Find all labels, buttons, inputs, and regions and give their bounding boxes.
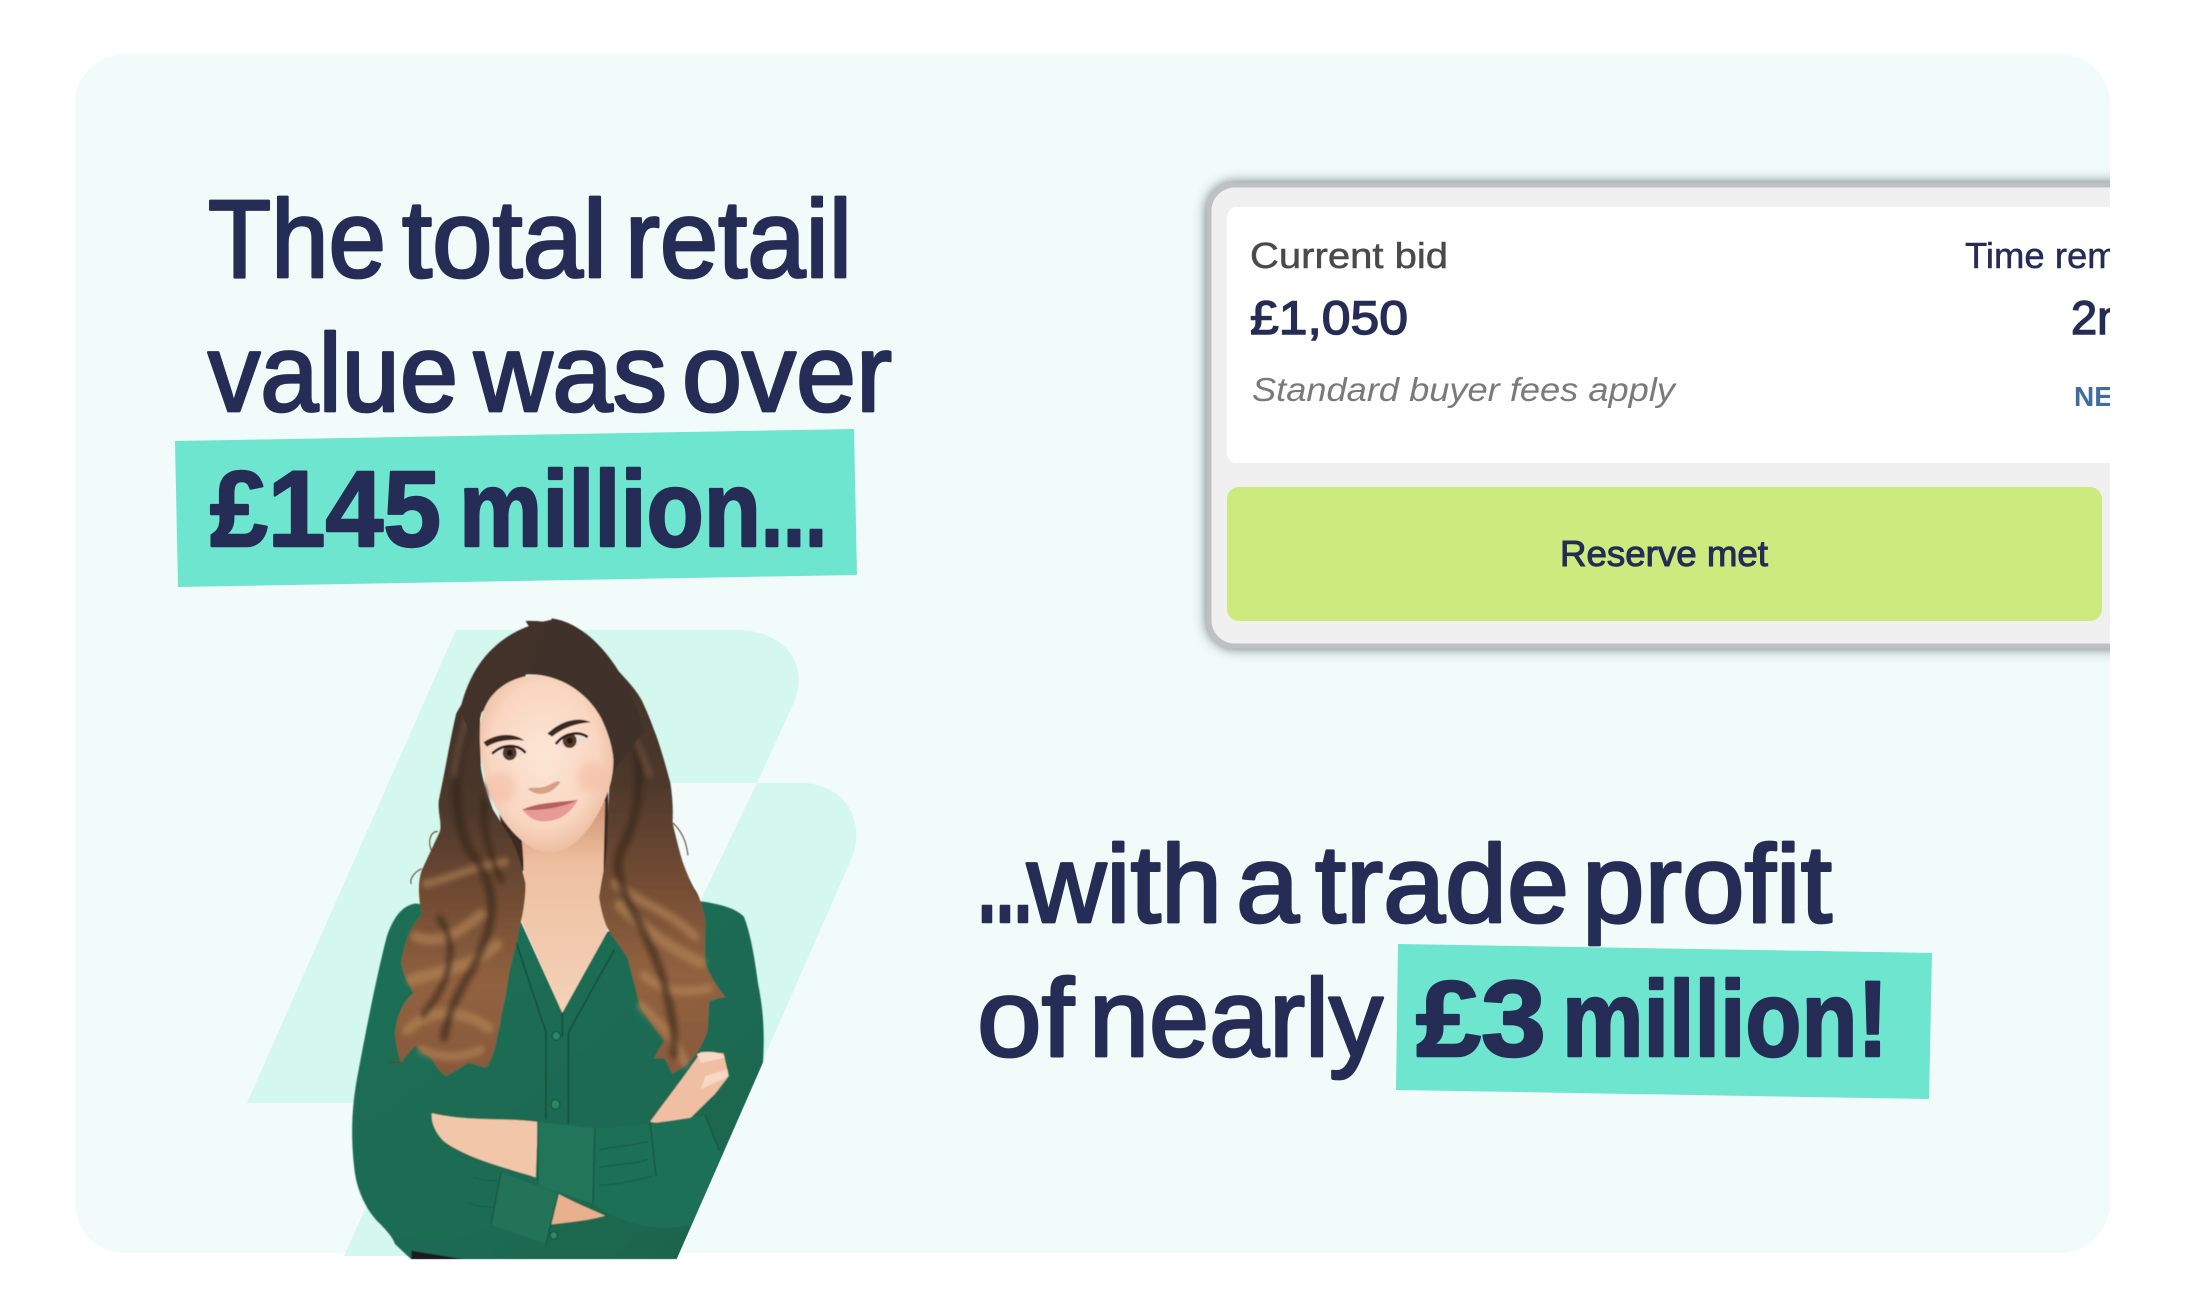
highlighted figure: £3 xyxy=(1416,958,1546,1079)
blouse xyxy=(352,901,764,1259)
hair: right side xyxy=(526,621,726,1074)
button label: Reserve met xyxy=(1560,533,1768,574)
decorative logo shapes xyxy=(247,630,856,1256)
current bid label: Current bid xyxy=(1250,235,1448,276)
line 1: profit xyxy=(1582,823,1832,946)
auction card xyxy=(1209,185,2185,646)
back hair behind the neck xyxy=(485,731,609,871)
cheek blush xyxy=(486,761,605,804)
card frame xyxy=(1209,185,2185,646)
heading line 2: value xyxy=(208,312,458,435)
hair strands xyxy=(402,718,714,1070)
lips xyxy=(522,800,578,821)
heading line 1 xyxy=(208,178,852,301)
highlight: £3 million xyxy=(1396,944,1932,1099)
nose xyxy=(528,781,560,794)
heading: total retail value xyxy=(175,178,892,587)
heading line 1: retail xyxy=(625,178,852,301)
photo: smiling woman with crossed arms xyxy=(352,618,764,1259)
hair: left side xyxy=(395,664,526,1076)
highlighted figure: £145 xyxy=(210,448,441,569)
line 1: trade xyxy=(1315,823,1569,946)
stray hair wisps xyxy=(389,823,699,1063)
heading line 2 xyxy=(208,312,892,435)
line 1 xyxy=(978,823,1832,946)
line 1: a xyxy=(1236,823,1300,946)
line 1: with xyxy=(1026,823,1222,946)
fee note: Standard buyer fees apply xyxy=(1252,371,1678,408)
button background xyxy=(1227,487,2102,621)
highlight band xyxy=(1396,944,1932,1099)
trousers hint xyxy=(411,1251,464,1259)
highlighted figure: million! xyxy=(1562,958,1888,1079)
highlight band xyxy=(175,429,857,587)
white info box xyxy=(1227,207,2185,463)
highlighted figure xyxy=(210,448,827,569)
collar edges xyxy=(514,936,615,1124)
time remaining value: 2m xyxy=(2071,291,2136,344)
heading line 2: over xyxy=(682,312,892,435)
heading line 2: was xyxy=(473,312,667,435)
highlight: £145 million xyxy=(175,429,857,587)
line 2: nearly xyxy=(1089,957,1383,1080)
heading line 1: total xyxy=(402,178,607,301)
highlighted figure: ... xyxy=(761,448,827,569)
new tag: NEW xyxy=(2074,381,2140,412)
reserve met button xyxy=(1227,487,2102,621)
current bid value: £1,050 xyxy=(1250,291,1408,344)
highlighted figure xyxy=(1416,958,1888,1079)
line 1: ... xyxy=(978,824,1032,945)
neck and chest xyxy=(517,801,608,1013)
buttons xyxy=(550,1031,560,1239)
line 2: of xyxy=(977,957,1074,1080)
heading: trade profit xyxy=(977,823,1932,1099)
eyebrows xyxy=(484,735,524,747)
eyes xyxy=(492,733,588,760)
folded arms xyxy=(430,1050,730,1244)
heading line 1: The xyxy=(208,178,386,301)
parted hair xyxy=(460,619,552,729)
highlighted figure: million xyxy=(459,448,761,569)
face xyxy=(480,675,613,852)
